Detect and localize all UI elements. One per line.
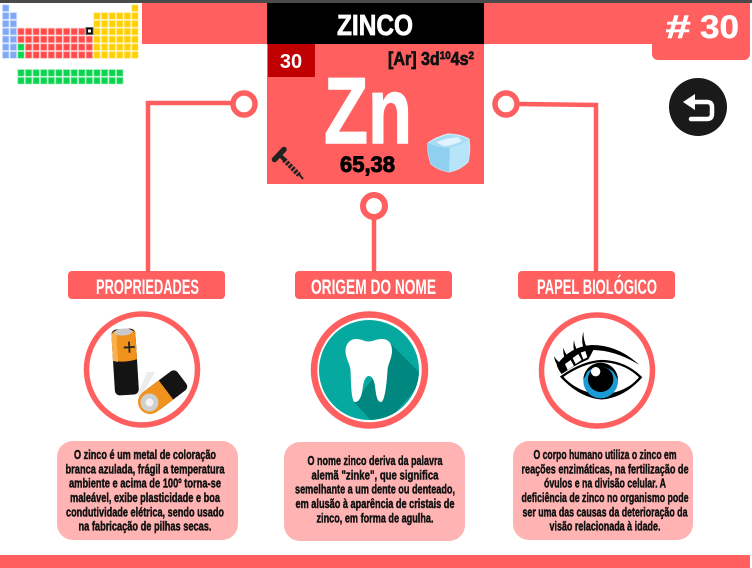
panel: papel biologico xyxy=(513,271,693,540)
text block: origem do nome: O nome zinco deriva da palavra xyxy=(308,454,443,468)
element card xyxy=(267,3,484,184)
icon: eye xyxy=(542,315,652,426)
heading: papel biologico xyxy=(518,271,675,299)
icon: ice cube xyxy=(428,134,470,172)
icon: tooth xyxy=(314,314,425,426)
card background xyxy=(267,44,484,184)
bottom band xyxy=(0,555,750,568)
atomic number xyxy=(268,44,315,77)
text block: papel biologico: deficiência de zinco no organismo pode xyxy=(522,491,689,505)
header band left xyxy=(142,3,267,44)
text block: papel biologico xyxy=(513,441,693,540)
element name bar xyxy=(267,3,484,44)
text block: origem do nome xyxy=(284,442,465,541)
icon: back button xyxy=(669,78,727,136)
header tab with element rank: # xyxy=(665,9,690,45)
heading: origem do nome: ORIGEM DO NOME xyxy=(311,276,436,299)
icon: batteries xyxy=(86,314,198,425)
heading: origem do nome xyxy=(295,271,452,299)
text block: propriedades: ambiente e acima de 100º torna-se xyxy=(69,476,221,490)
text block: papel biologico: visão relacionada à idade. xyxy=(550,520,660,534)
connector: propriedades xyxy=(148,93,255,272)
electron configuration: 2 xyxy=(469,50,474,62)
heading: papel biologico: PAPEL BIOLÓGICO xyxy=(537,275,657,299)
element symbol: Zn xyxy=(324,58,412,163)
heading: propriedades: PROPRIEDADES xyxy=(96,276,199,299)
atomic mass: 65,38 xyxy=(340,152,395,177)
heading: propriedades xyxy=(68,271,225,299)
text block: propriedades: branca azulada, frágil a temperatura xyxy=(66,462,225,476)
electron configuration: 4s xyxy=(451,49,469,69)
text block: propriedades xyxy=(57,441,238,540)
text block: origem do nome: alemã "zinke", que significa xyxy=(312,468,439,482)
text block: propriedades: na fabricação de pilhas secas. xyxy=(78,520,212,534)
text block: papel biologico: reações enzimáticas, na fertilização de xyxy=(522,462,689,476)
text block: propriedades: maleável, exibe plasticidade e boa xyxy=(70,491,221,505)
icon: screw xyxy=(274,150,303,179)
text block: propriedades: condutividade elétrica, sendo usado xyxy=(66,505,224,519)
header tab with element rank: 30 xyxy=(700,9,739,45)
connector: origem do nome xyxy=(363,195,385,272)
panel: origem do nome xyxy=(284,271,465,541)
text block: origem do nome: zinco, em forma de agulha. xyxy=(316,511,434,525)
connector: papel biologico xyxy=(495,93,596,272)
top dark bar xyxy=(0,0,752,3)
periodic table mini map xyxy=(2,4,139,85)
electron configuration: 10 xyxy=(440,50,451,62)
text block: propriedades: O zinco é um metal de coloração xyxy=(74,448,216,462)
header tab with element rank xyxy=(484,3,750,60)
panel: propriedades xyxy=(57,271,238,540)
element name bar: ZINCO xyxy=(337,10,413,42)
text block: origem do nome: em alusão à aparência de cristais de xyxy=(296,497,455,511)
atomic number: 30 xyxy=(280,51,302,73)
electron configuration: [Ar] 3d xyxy=(388,49,446,69)
text block: papel biologico: O corpo humano utiliza o zinco em xyxy=(534,448,676,462)
text block: papel biologico: óvulos e na divisão celular. A xyxy=(544,476,666,490)
text block: origem do nome: semelhante a um dente ou denteado, xyxy=(295,483,455,497)
text block: papel biologico: ser uma das causas da deterioração da xyxy=(522,505,688,519)
